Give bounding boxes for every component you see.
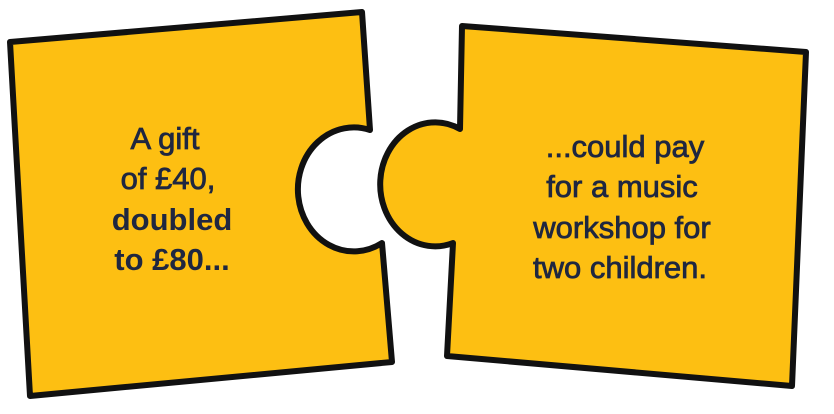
panel: right puzzle piece [380,26,806,386]
text: left: doubled [112,202,232,237]
text: right: ...could pay [546,129,705,164]
text: right: for a music [546,169,698,204]
text: right: workshop for [532,210,711,245]
text: right: two children. [533,250,707,285]
text: right [532,129,711,285]
text: left: A gift [131,121,200,156]
text: left: to £80... [114,242,230,277]
text: left: of £40, [121,161,215,196]
panel: left puzzle piece [10,12,392,396]
text: left [112,121,232,277]
